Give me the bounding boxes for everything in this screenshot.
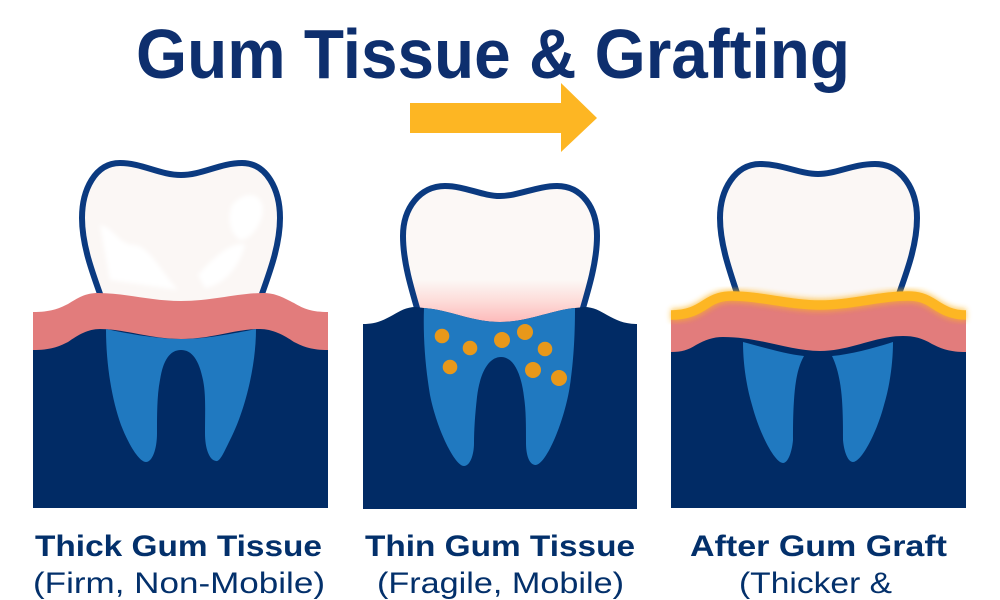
panel: thick gum tissue bbox=[33, 163, 328, 508]
crown outline bbox=[403, 186, 597, 325]
label: thick gum tissue bbox=[33, 530, 325, 600]
label: after gum graft bbox=[690, 530, 947, 600]
bone block bbox=[363, 307, 637, 509]
label: thin gum tissue: Thin Gum Tissue bbox=[365, 530, 635, 563]
label: after gum graft: After Gum Graft bbox=[690, 530, 947, 563]
bacteria dots bbox=[435, 324, 567, 386]
title: Gum Tissue & Grafting bbox=[136, 15, 850, 93]
thickened gum bbox=[671, 296, 966, 352]
tooth crown bbox=[720, 164, 917, 305]
tooth crown bbox=[403, 186, 597, 330]
tooth roots bbox=[424, 308, 575, 466]
label: after gum graft: (Thicker & bbox=[739, 567, 892, 600]
crown outline bbox=[720, 164, 917, 305]
tooth roots bbox=[106, 329, 256, 462]
tooth crown bbox=[82, 163, 280, 305]
graft band bbox=[671, 296, 966, 315]
arrow bbox=[410, 83, 597, 152]
bone block bbox=[671, 335, 966, 508]
panel: after gum graft bbox=[671, 164, 966, 508]
gum tissue bbox=[33, 293, 328, 350]
graft glow bbox=[671, 296, 966, 315]
left root bbox=[743, 342, 804, 463]
right root bbox=[832, 342, 893, 462]
bone block bbox=[33, 320, 328, 508]
label: thin gum tissue bbox=[365, 530, 635, 600]
crown outline bbox=[82, 163, 280, 305]
label: thick gum tissue: Thick Gum Tissue bbox=[35, 530, 322, 563]
enamel highlights bbox=[100, 195, 263, 290]
label: thin gum tissue: (Fragile, Mobile) bbox=[377, 567, 624, 600]
panel: thin gum tissue bbox=[363, 186, 637, 509]
label: thick gum tissue: (Firm, Non-Mobile) bbox=[33, 567, 325, 600]
